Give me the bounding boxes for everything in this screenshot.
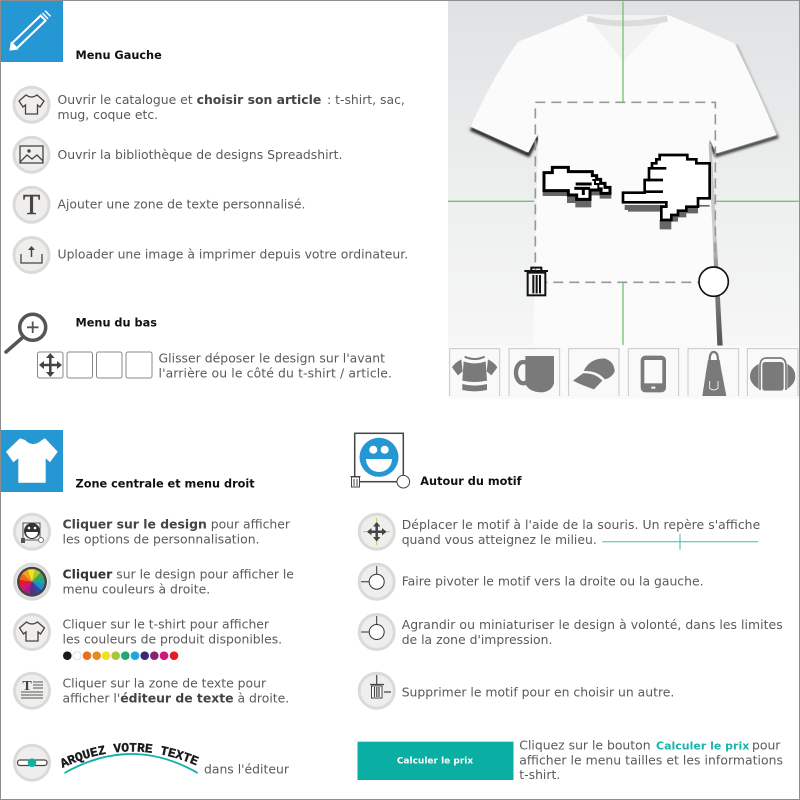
- item: colour wheel: [14, 564, 294, 599]
- item: delete: [359, 673, 674, 708]
- description: button: [519, 737, 783, 782]
- button: calculer le prix: [358, 742, 514, 780]
- item: arched text: [13, 742, 290, 782]
- panel: zone centrale et menu droit: [1, 430, 294, 782]
- t-shirt: [471, 14, 778, 347]
- item: move: [359, 514, 760, 550]
- item: text editor: T: [22, 679, 32, 694]
- item: move: quand vous atteignez le milieu.: [402, 532, 597, 547]
- icon: smiley selection: [350, 433, 410, 488]
- item: library: Ouvrir la bibliothèque de designs Spreadshirt.: [58, 147, 342, 162]
- item: catalogue: [14, 87, 405, 122]
- item: rotate: [359, 564, 704, 599]
- icon: trash handle: [524, 268, 548, 295]
- item: catalogue: Ouvrir le catalogue et choisir son article: [58, 92, 321, 107]
- button: calculer le prix: Calculer le prix: [397, 756, 473, 766]
- heading: Zone centrale et menu droit: [76, 478, 255, 491]
- icon tile: pencil: [0, 0, 63, 62]
- item: text zone: Ajouter une zone de texte personnalisé.: [58, 197, 305, 212]
- item: text zone: T: [23, 190, 40, 221]
- item: colour wheel: Cliquer sur le design pour afficher le: [62, 567, 294, 582]
- view boxes: [38, 352, 152, 378]
- tab icon: mug: [516, 356, 554, 392]
- item: delete: Supprimer le motif pour en choisir un autre.: [402, 685, 674, 700]
- item: library: [14, 137, 342, 172]
- icon: rotate and resize handle: [699, 267, 728, 296]
- description: button: Cliquez sur le bouton: [519, 737, 651, 752]
- item: product colours: [14, 614, 282, 660]
- description: Glisser déposer le design sur l'avant: [158, 351, 385, 366]
- item: product colours: les couleurs de produit disponibles.: [62, 632, 282, 647]
- item: text editor: Cliquer sur la zone de texte pour: [62, 676, 267, 691]
- tab frames: [450, 349, 798, 396]
- description: button: afficher le menu tailles et les informations: [519, 752, 783, 767]
- tab icon: t-shirt: [452, 357, 497, 391]
- pixel hand left: [544, 167, 610, 206]
- item: product colours: Cliquer sur le t-shirt pour afficher: [62, 617, 270, 632]
- panel: menu du bas: [6, 314, 392, 381]
- item: upload: Uploader une image à imprimer depuis votre ordinateur.: [58, 247, 408, 262]
- item: arched text: dans l'éditeur: [204, 761, 290, 776]
- heading: Menu Gauche: [76, 49, 162, 62]
- description: button: t-shirt.: [519, 767, 560, 782]
- icon: magnifier: [6, 314, 46, 352]
- tab icon: phone: [641, 356, 666, 392]
- item: catalogue: : t-shirt, sac,: [327, 92, 405, 107]
- item: rotate: Faire pivoter le motif vers la droite ou la gauche.: [402, 573, 704, 588]
- heading: Menu du bas: [76, 317, 157, 330]
- product tabs: [450, 349, 798, 396]
- item: resize: de la zone d'impression.: [402, 632, 552, 647]
- panel: autour du motif: [350, 433, 783, 782]
- item: text editor: afficher l'éditeur de texte à droite.: [62, 691, 289, 706]
- item: resize: [359, 614, 783, 650]
- item: design: les options de personnalisation.: [62, 532, 260, 547]
- description: button: pour: [752, 737, 781, 752]
- panel: menu gauche: [0, 0, 408, 272]
- dashed print area: [535, 102, 715, 282]
- item: design: Cliquer sur le design pour afficher: [62, 517, 291, 532]
- item: resize: Agrandir ou miniaturiser le design à volonté, dans les limites: [402, 617, 783, 632]
- item: catalogue: mug, coque etc.: [58, 107, 158, 122]
- guide line sample: [602, 534, 758, 550]
- description: button: Calculer le prix: [656, 739, 749, 752]
- item: move: Déplacer le motif à l'aide de la souris. Un repère s'affiche: [402, 517, 760, 532]
- icon tile: t-shirt: [0, 430, 63, 492]
- center guide lines: [448, 2, 799, 345]
- tab icon: cap: [573, 358, 615, 389]
- pixel hand right: [623, 155, 710, 229]
- design: pixel hands: [544, 155, 710, 229]
- item: upload: [14, 238, 408, 272]
- description: [158, 351, 392, 381]
- item: design: [14, 514, 291, 549]
- tab icon: bag: [750, 358, 795, 391]
- item: text zone: [14, 187, 305, 222]
- item: text editor: [14, 673, 289, 708]
- tab icon: apron: [702, 352, 726, 396]
- colour swatches: [63, 651, 178, 660]
- item: colour wheel: menu couleurs à droite.: [62, 581, 210, 596]
- heading: Autour du motif: [420, 475, 523, 488]
- panel: t-shirt editor preview: [448, 0, 800, 399]
- arched sample text: ARQUEZ VOTRE TEXTE: [61, 742, 199, 768]
- description: l'arrière ou le côté du t-shirt / article.: [158, 366, 392, 381]
